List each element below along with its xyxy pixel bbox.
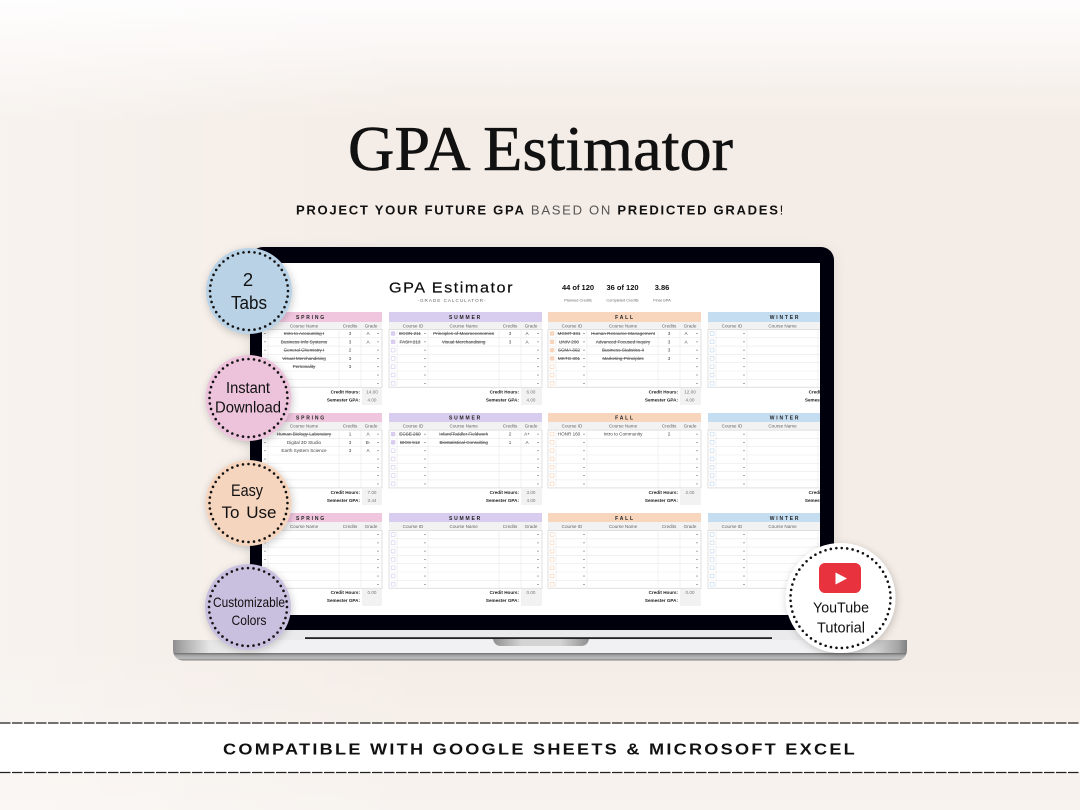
panel: row 3 fall: Credit Hours:: [649, 590, 678, 595]
panel: row 1 fall: Business Statistics II: [602, 348, 644, 353]
panel: row 2 fall: Intro to Community: [604, 432, 643, 436]
panel: row 2 spring: Credits: [343, 424, 358, 428]
panel: row 3 spring: 0.00: [368, 590, 377, 595]
panel: row 1 summer: ECON 211: [399, 331, 421, 336]
panel: row 1 spring: [262, 312, 382, 405]
panel: row 3 summer: SUMMER: [449, 516, 482, 522]
panel: row 1 fall: 12.00: [684, 390, 696, 394]
panel: row 1 winter: WINTER: [770, 315, 800, 321]
panel: row 1 summer: A: [525, 339, 529, 344]
panel: row 2 summer: ECSE 260: [399, 432, 421, 436]
panel: row 2 fall: Credit Hours:: [649, 490, 678, 495]
panel: row 3 fall: 0.00: [686, 590, 695, 595]
badge: Customizable Colors: Colors: [232, 612, 266, 628]
panel: row 1 winter: Credit Hours:: [809, 390, 838, 394]
panel: row 2 winter: Credit Hours:: [809, 490, 838, 495]
panel: row 2 spring: 3: [349, 440, 352, 445]
panel: row 1 fall: Advanced Focused Inquiry: [596, 339, 651, 344]
panel: row 2 spring: Digital 3D Studio: [287, 440, 322, 445]
panel: row 1 summer: Principles of Macroeconomics: [433, 331, 495, 336]
panel: row 3 summer: Course ID: [403, 524, 424, 529]
panel: row 2 summer: BIOS 512: [400, 440, 420, 445]
panel: row 3 summer: Course Name: [450, 524, 478, 529]
panel: row 2 fall: [548, 413, 701, 505]
panel: row 2 winter: Semester GPA:: [805, 498, 838, 503]
panel: row 2 fall: Credits: [662, 424, 677, 428]
panel: row 1 summer: Grade: [525, 324, 538, 328]
panel: row 1 fall: Human Resource Management: [591, 331, 656, 336]
panel: row 2 spring: SPRING: [296, 416, 326, 422]
panel: row 3 summer: 0.00: [527, 590, 536, 595]
panel: row 1 summer: 3: [509, 331, 512, 336]
panel: row 2 spring: 3: [349, 448, 352, 453]
panel: row 1 summer: Course Name: [450, 324, 478, 328]
spreadsheet stats: 36 of 120: [606, 283, 639, 292]
panel: row 3 winter: [708, 513, 820, 589]
panel: row 2 spring: Course Name: [290, 424, 319, 428]
panel: row 2 summer: [389, 413, 542, 505]
panel: row 3 summer: [389, 513, 542, 606]
panel: row 1 spring: Credits: [343, 324, 358, 328]
panel: row 1 fall: 3: [668, 348, 671, 353]
badge: YouTube Tutorial: [786, 543, 896, 653]
panel: row 3 winter: WINTER: [770, 516, 800, 522]
panel: row 2 spring: [229, 413, 382, 505]
panel: row 2 summer: Credits: [503, 424, 518, 428]
panel: row 1 fall: A: [684, 331, 688, 336]
panel: row 3 summer: Semester GPA:: [486, 598, 519, 603]
panel: row 2 summer: Credit Hours:: [490, 490, 519, 495]
panel: row 1 fall: A: [684, 339, 688, 344]
panel: row 1 spring: Semester GPA:: [327, 398, 360, 402]
panel: row 1 summer: SUMMER: [449, 315, 482, 321]
panel: row 1 summer: 3: [509, 339, 512, 344]
panel: row 3 fall: Credits: [662, 524, 677, 529]
panel: row 2 spring: A: [366, 432, 370, 436]
panel: row 2 spring: Human Biology Laboratory: [277, 432, 332, 436]
panel: row 2 summer: Biostatistical Consulting: [439, 440, 488, 445]
panel: row 1 summer: A: [525, 331, 529, 336]
panel: row 3 spring: Credits: [343, 524, 358, 529]
spreadsheet stats: 3.86: [655, 283, 669, 292]
panel: row 1 spring: Credit Hours:: [331, 390, 360, 394]
laptop base: [173, 630, 907, 660]
panel: row 3 spring: Grade: [365, 524, 378, 529]
panel: row 2 winter: WINTER: [770, 416, 800, 422]
panel: row 2 summer: Course Name: [450, 424, 478, 428]
panel: row 1 fall: Semester GPA:: [645, 398, 678, 402]
panel: row 3 winter: Course ID: [722, 524, 743, 529]
panel: row 2 summer: 4.00: [527, 498, 536, 503]
panel: row 3 spring: SPRING: [296, 516, 326, 522]
panel: row 2 summer: Infant/Toddler Fieldwork: [439, 432, 489, 436]
spreadsheet stats: [562, 283, 671, 302]
badge: Instant Download: Instant: [226, 380, 271, 397]
panel: row 1 fall: 3: [668, 331, 671, 336]
panel: row 3 summer: Grade: [525, 524, 538, 529]
panel: row 1 spring: Intro to Accounting I: [284, 331, 324, 336]
panel: row 1 fall: 3: [668, 339, 671, 344]
panel: row 3 spring: [229, 513, 382, 606]
spreadsheet stats: 44 of 120: [562, 283, 594, 292]
badge: YouTube Tutorial: YouTube: [813, 600, 869, 616]
title: GPA Estimator: [348, 113, 733, 184]
panel: row 1 fall: Credit Hours:: [649, 390, 678, 394]
panel: row 1 spring: 3: [349, 356, 352, 361]
panel: row 2 winter: [708, 413, 820, 502]
panel: row 2 fall: FALL: [615, 416, 635, 422]
panel: row 2 fall: Course ID: [562, 424, 583, 428]
panel: row 1 fall: 4.00: [686, 398, 695, 402]
panel: row 1 spring: Grade: [365, 324, 378, 328]
panel: row 1 spring: SPRING: [296, 315, 326, 321]
panel: row 2 summer: 3.00: [527, 490, 536, 495]
panel: row 2 spring: A: [366, 448, 370, 453]
panel: row 2 fall: HONR 160: [558, 432, 581, 436]
panel: row 1 spring: Visual Merchandising: [282, 356, 326, 361]
panel: row 2 spring: Credit Hours:: [331, 490, 360, 495]
subtitle: PROJECT YOUR FUTURE GPA BASED ON PREDICTED GRADES!: [296, 202, 785, 217]
panel: row 2 spring: Semester GPA:: [327, 498, 360, 503]
badge: 2 Tabs: Tabs: [231, 292, 267, 313]
panel: row 1 summer: FASH 213: [400, 339, 421, 344]
panel: row 1 winter: Semester GPA:: [805, 398, 838, 402]
panel: row 1 fall: MGMT 331: [558, 331, 581, 336]
panel: row 1 fall: [548, 312, 701, 405]
panel: row 2 summer: 2: [509, 432, 512, 436]
panel: row 3 summer: Credit Hours:: [490, 590, 519, 595]
panel: row 1 spring: 2: [349, 348, 352, 353]
panel: row 1 spring: Business Info Systems: [281, 339, 328, 344]
badge: YouTube Tutorial: Tutorial: [817, 620, 865, 636]
panel: row 1 summer: Credit Hours:: [490, 390, 519, 394]
panel: row 3 fall: Course ID: [562, 524, 583, 529]
panel: row 1 summer: Course ID: [403, 324, 424, 328]
spreadsheet title: -GRADE CALCULATOR-: [417, 298, 487, 303]
panel: row 3 fall: Grade: [684, 524, 697, 529]
spreadsheet title: [390, 281, 512, 302]
icon: YouTube play button: [819, 563, 861, 593]
panel: row 1 fall: SCMA 302: [558, 348, 580, 353]
panel: row 1 fall: Course Name: [609, 324, 638, 328]
panel: row 2 spring: 7.00: [368, 490, 377, 495]
panel: row 1 fall: Marketing Principles: [602, 356, 644, 361]
spreadsheet stats: Final GPA: [653, 298, 671, 302]
panel: row 1 summer: [389, 312, 542, 405]
panel: row 3 fall: Semester GPA:: [645, 598, 678, 603]
panel: row 1 fall: MKTG 301: [558, 356, 581, 361]
panel: row 1 fall: Grade: [684, 324, 697, 328]
panel: row 1 summer: Credits: [503, 324, 518, 328]
panel: row 3 fall: Course Name: [609, 524, 638, 529]
panel: row 1 fall: FALL: [615, 315, 635, 321]
badge: 2 Tabs: [206, 248, 292, 334]
laptop lid and bezel: [250, 247, 834, 631]
badge: 2 Tabs: 2: [243, 269, 253, 290]
panel: row 2 summer: Semester GPA:: [486, 498, 519, 503]
panel: row 3 fall: FALL: [615, 516, 635, 522]
panel: row 2 spring: Earth System Science: [281, 448, 327, 453]
panel: row 1 spring: A: [366, 331, 370, 336]
panel: row 1 spring: Personality: [293, 364, 316, 369]
panel: row 1 winter: Course ID: [722, 324, 743, 328]
panel: row 1 spring: A: [366, 339, 370, 344]
panel: row 2 winter: Course ID: [722, 424, 743, 428]
badge: Customizable Colors: [205, 564, 291, 650]
panel: row 1 summer: Visual Merchandising: [442, 339, 486, 344]
panel: row 2 spring: Grade: [365, 424, 378, 428]
panel: row 2 summer: A+: [524, 432, 530, 436]
panel: row 2 fall: Grade: [684, 424, 697, 428]
panel: row 1 spring: 3: [349, 364, 352, 369]
panel: row 3 fall: [548, 513, 701, 606]
panel: row 2 summer: A: [525, 440, 529, 445]
badge: Easy To Use: Easy: [231, 481, 263, 500]
panel: row 2 spring: 1: [349, 432, 352, 436]
panel: row 3 spring: Course Name: [290, 524, 319, 529]
spreadsheet stats: Completed Credits: [606, 298, 639, 302]
badge: Instant Download: [206, 355, 292, 441]
panel: row 2 fall: 2: [668, 432, 671, 436]
panel: row 2 spring: 3.44: [368, 498, 377, 503]
panel: row 3 spring: Credit Hours:: [331, 590, 360, 595]
panel: row 2 summer: Grade: [525, 424, 538, 428]
panel: row 2 winter: Course Name: [768, 424, 797, 428]
badge: Customizable Colors: Customizable: [213, 594, 285, 610]
panel: row 2 fall: Semester GPA:: [645, 498, 678, 503]
panel: row 1 winter: Course Name: [768, 324, 797, 328]
panel: row 1 spring: 4.00: [368, 398, 377, 402]
panel: row 3 winter: Course Name: [768, 524, 797, 529]
spreadsheet title: GPA Estimator: [389, 280, 514, 296]
badge: Easy To Use: To Use: [222, 503, 276, 522]
panel: row 2 summer: Course ID: [403, 424, 424, 428]
panel: row 1 summer: 4.00: [527, 398, 536, 402]
panel: row 1 summer: 6.00: [527, 390, 536, 394]
panel: row 1 spring: Course Name: [290, 324, 319, 328]
spreadsheet stats: Planned Credits: [564, 298, 592, 302]
panel: row 3 spring: Semester GPA:: [327, 598, 360, 603]
laptop: [173, 247, 907, 660]
badge: Instant Download: Download: [215, 400, 281, 416]
panel: row 1 spring: 3: [349, 331, 352, 336]
panel: row 1 spring: 14.00: [366, 390, 378, 394]
panel: row 1 fall: UNIV 200: [559, 339, 579, 344]
panel: row 1 fall: 3: [668, 356, 671, 361]
panel: row 2 fall: 2.00: [686, 490, 695, 495]
panel: row 1 fall: Credits: [662, 324, 677, 328]
panel: row 1 spring: 3: [349, 339, 352, 344]
panel: row 1 summer: Semester GPA:: [486, 398, 519, 402]
panel: row 1 spring: General Chemistry I: [284, 348, 324, 353]
panel: row 3 summer: Credits: [503, 524, 518, 529]
panel: row 2 spring: B-: [366, 440, 371, 445]
panel: row 1 fall: Course ID: [562, 324, 583, 328]
panel: row 2 summer: 1: [509, 440, 512, 445]
panel: row 1 winter: [708, 312, 820, 402]
panel: row 2 summer: SUMMER: [449, 416, 482, 422]
footer text: COMPATIBLE WITH GOOGLE SHEETS & MICROSOFT EXCEL: [223, 742, 857, 758]
panel: row 2 fall: Course Name: [609, 424, 638, 428]
badge: Easy To Use: [206, 460, 292, 546]
laptop screen: spreadsheet: [262, 263, 820, 615]
footer band: [0, 723, 1080, 772]
